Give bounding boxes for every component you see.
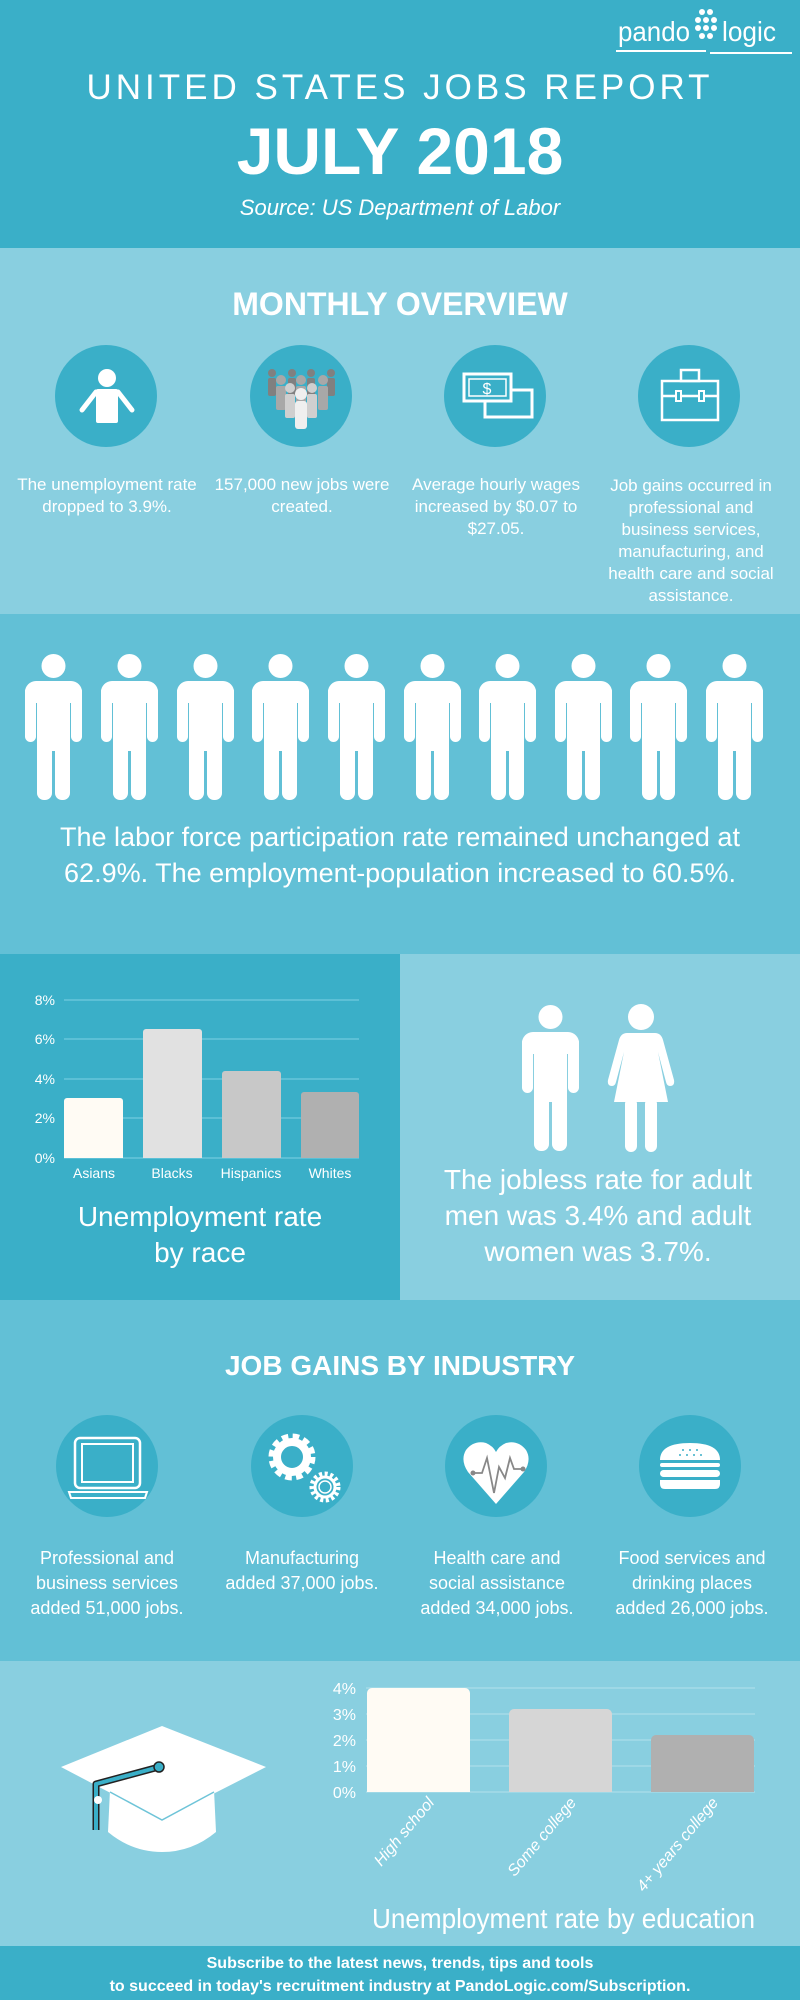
bar chart: education: 4% [333, 1681, 356, 1698]
icon: burger [639, 1415, 741, 1517]
text: health care: added 34,000 jobs. [420, 1598, 574, 1618]
footer: Subscribe to the latest news, trends, tips and tools [207, 1955, 593, 1972]
heading: July 2018: JULY 2018 [237, 114, 563, 188]
logo: pando [618, 16, 690, 47]
bar chart: race: Hispanics [221, 1165, 281, 1181]
panel: gender jobless rate [400, 954, 800, 1300]
bar chart: race: 0% [35, 1150, 55, 1166]
text: professional services: added 51,000 jobs. [30, 1598, 184, 1618]
panel: monthly overview [0, 248, 800, 614]
icon: briefcase [638, 345, 740, 447]
panel: labor force participation [0, 614, 800, 954]
text: new jobs: 157,000 new jobs were [215, 475, 389, 494]
chart title: education: Unemployment rate by education [372, 1903, 755, 1934]
text: job gains: health care and social [608, 564, 774, 583]
bar chart: race: Whites [309, 1165, 351, 1181]
bar chart: education: High school [371, 1794, 438, 1870]
icon: man [522, 1005, 579, 1151]
icon: laptop [56, 1415, 158, 1517]
text: manufacturing: added 37,000 jobs. [225, 1573, 379, 1593]
bar chart: race: 4% [35, 1071, 55, 1087]
icon: gears [251, 1415, 353, 1517]
panel: unemployment by race [0, 954, 400, 1300]
text: health care: social assistance [429, 1573, 565, 1593]
text: new jobs: created. [271, 497, 333, 516]
icon: row of ten figures [25, 654, 763, 800]
text: professional services: business services [36, 1573, 178, 1593]
bar chart: education [333, 1681, 755, 1895]
text: wages: $27.05. [468, 519, 524, 538]
bar chart: race: Asians [73, 1165, 115, 1181]
bar chart: education: 1% [333, 1759, 356, 1776]
icon: crowd [250, 345, 352, 447]
text: jobless rate by gender: The jobless rate for adult [444, 1164, 752, 1195]
text: unemployment rate: The unemployment rate [17, 475, 197, 494]
text: wages: increased by $0.07 to [415, 497, 577, 516]
text: participation rate: 62.9%. The employment-population increased to 60.5%. [64, 858, 736, 888]
bar chart: race: 6% [35, 1031, 55, 1047]
heading: monthly overview: MONTHLY OVERVIEW [232, 286, 569, 322]
chart title: race: by race [154, 1237, 246, 1268]
panel: unemployment by education [0, 1661, 800, 1946]
icon: graduation cap [61, 1726, 266, 1852]
text: food services: drinking places [632, 1573, 752, 1593]
icon: person [55, 345, 157, 447]
bar chart: education: 2% [333, 1733, 356, 1750]
bar chart: race: 8% [35, 992, 55, 1008]
text: job gains: Job gains occurred in [610, 476, 772, 495]
icon: money: $ [483, 381, 492, 398]
bar chart: race [35, 992, 359, 1181]
bar chart: education: Some college [505, 1795, 580, 1880]
text: job gains: professional and [629, 498, 753, 517]
text: jobless rate by gender: women was 3.7%. [483, 1236, 712, 1267]
logo [616, 9, 792, 54]
bar chart: education: 3% [333, 1707, 356, 1724]
icon: woman [608, 1004, 674, 1152]
panel: job gains by industry [0, 1300, 800, 1661]
text: professional services: Professional and [40, 1548, 174, 1568]
text: wages: Average hourly wages [412, 475, 580, 494]
source: Source: US Department of Labor [240, 195, 562, 220]
text: manufacturing: Manufacturing [245, 1548, 359, 1568]
header band [0, 0, 800, 248]
text: health care: Health care and [433, 1548, 561, 1568]
text: food services: added 26,000 jobs. [615, 1598, 769, 1618]
text: job gains: assistance. [648, 586, 734, 605]
logo: logic [722, 16, 776, 47]
text: unemployment rate: dropped to 3.9%. [42, 497, 172, 516]
icon: heart with pulse [445, 1415, 547, 1517]
heading: job gains by industry: JOB GAINS BY INDUSTRY [225, 1350, 575, 1381]
text: food services: Food services and [618, 1548, 766, 1568]
chart title: race: Unemployment rate [78, 1201, 322, 1232]
footer: to succeed in today's recruitment industry at PandoLogic.com/Subscription. [110, 1978, 690, 1995]
text: job gains: business services, [622, 520, 760, 539]
bar chart: education: 4+ years college [634, 1795, 722, 1895]
title: UNITED STATES JOBS REPORT [86, 68, 714, 107]
bar chart: race: Blacks [151, 1165, 193, 1181]
text: job gains: manufacturing, and [618, 542, 764, 561]
icon: money [444, 345, 546, 447]
text: jobless rate by gender: men was 3.4% and adult [445, 1200, 752, 1231]
footer [0, 1946, 800, 2000]
bar chart: education: 0% [333, 1785, 356, 1802]
text: participation rate: The labor force participation rate remained unchanged at [60, 822, 740, 852]
bar chart: race: 2% [35, 1110, 55, 1126]
